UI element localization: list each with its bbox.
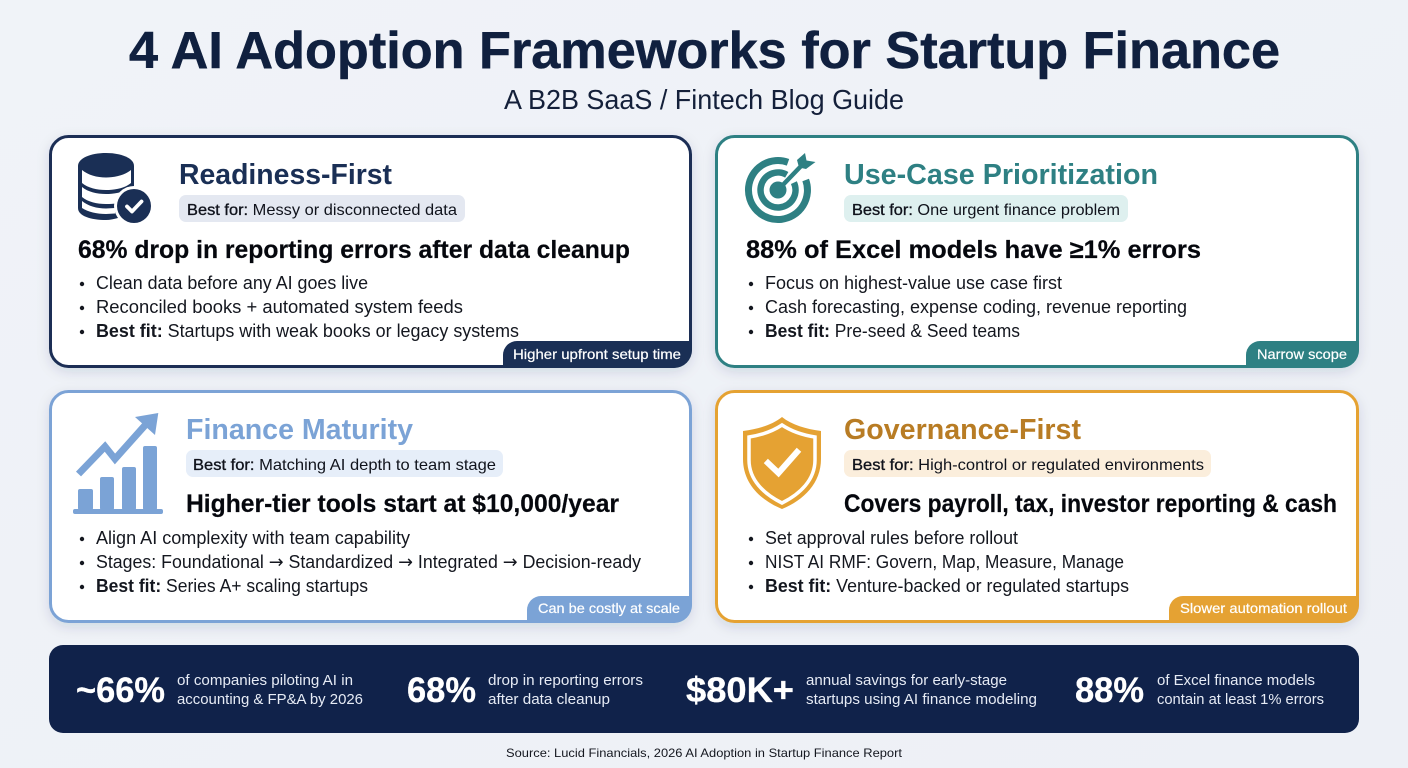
best-for pill: Best for: Matching AI depth to team stage xyxy=(193,457,496,474)
tradeoff tag: Can be costly at scale xyxy=(538,600,680,616)
bullet list: NIST AI RMF: Govern, Map, Measure, Manage xyxy=(765,552,1124,572)
icon: rising bar chart xyxy=(73,413,163,514)
stat: 88% errors xyxy=(1075,671,1324,710)
best-for pill: Best for: One urgent finance problem xyxy=(852,202,1120,219)
heading: Readiness-First xyxy=(179,159,392,191)
stat: $80K+ savings xyxy=(686,671,1037,710)
panel: Governance-First xyxy=(716,392,1359,623)
bullet list xyxy=(749,273,1187,341)
stat: 66% piloting: of companies piloting AI in xyxy=(177,672,353,689)
stat headline: Higher-tier tools start at $10,000/year xyxy=(186,490,619,518)
bullet list: Clean data before any AI goes live xyxy=(96,273,368,293)
subtitle: A B2B SaaS / Fintech Blog Guide xyxy=(504,84,904,115)
stat headline: 88% of Excel models have ≥1% errors xyxy=(746,236,1201,264)
bullet list xyxy=(80,528,641,596)
bullet list xyxy=(749,528,1129,596)
bullet list: Best fit: Pre-seed & Seed teams xyxy=(765,321,1020,341)
stat: 68% drop xyxy=(407,671,643,710)
stat: $80K+ savings: $80K+ xyxy=(686,671,794,710)
stat headline: 68% drop in reporting errors after data cleanup xyxy=(78,236,630,264)
best-for pill xyxy=(186,450,503,477)
icon: target with arrow xyxy=(748,153,816,220)
tradeoff tag: Higher upfront setup time xyxy=(513,346,681,362)
panel: Readiness-First xyxy=(50,136,692,368)
stat: 66% piloting xyxy=(76,671,363,710)
stat: 88% errors: 88% xyxy=(1075,671,1144,710)
bullet list: Best fit: Series A+ scaling startups xyxy=(96,576,368,596)
icon: database with check xyxy=(78,153,154,226)
stat: 66% piloting: ~66% xyxy=(76,671,165,710)
stat: 68% drop: drop in reporting errors xyxy=(488,672,643,689)
tradeoff tag: Slower automation rollout xyxy=(1180,600,1347,616)
tradeoff tag xyxy=(1169,596,1359,623)
stats bar xyxy=(49,645,1359,733)
stat: 68% drop: after data cleanup xyxy=(488,691,610,708)
panel: Finance Maturity xyxy=(50,392,692,623)
stat: $80K+ savings: annual savings for early-stage xyxy=(806,672,1007,689)
bullet list: Focus on highest-value use case first xyxy=(765,273,1062,293)
heading: Use-Case Prioritization xyxy=(844,159,1158,191)
icon: shield with check xyxy=(743,417,821,509)
stat: 88% errors: of Excel finance models xyxy=(1157,672,1315,689)
best-for pill xyxy=(844,195,1128,222)
stat headline: Covers payroll, tax, investor reporting & cash xyxy=(844,490,1337,518)
bullet list: Best fit: Startups with weak books or legacy systems xyxy=(96,321,519,341)
best-for pill xyxy=(179,195,465,222)
bullet list: Best fit: Venture-backed or regulated startups xyxy=(765,576,1129,596)
stat: 68% drop: 68% xyxy=(407,671,476,710)
tradeoff tag xyxy=(527,596,692,623)
panel: Use-Case Prioritization xyxy=(716,136,1359,368)
stat: 66% piloting: accounting & FP&A by 2026 xyxy=(177,691,363,708)
best-for pill xyxy=(844,450,1211,477)
source note: Source: Lucid Financials, 2026 AI Adoption in Startup Finance Report xyxy=(506,746,903,760)
tradeoff tag xyxy=(503,341,692,368)
bullet list xyxy=(80,273,519,341)
heading: Finance Maturity xyxy=(186,414,413,446)
bullet list: Stages: Foundational → Standardized → Integrated → Decision-ready xyxy=(96,552,641,573)
tradeoff tag: Narrow scope xyxy=(1257,346,1347,362)
stat: $80K+ savings: startups using AI finance modeling xyxy=(806,691,1037,708)
best-for pill: Best for: High-control or regulated environments xyxy=(852,457,1204,474)
best-for pill: Best for: Messy or disconnected data xyxy=(187,202,457,219)
bullet list: Set approval rules before rollout xyxy=(765,528,1018,548)
bullet list: Align AI complexity with team capability xyxy=(96,528,410,548)
title: 4 AI Adoption Frameworks for Startup Finance xyxy=(129,22,1280,80)
bullet list: Cash forecasting, expense coding, revenue reporting xyxy=(765,297,1187,317)
tradeoff tag xyxy=(1246,341,1359,368)
heading: Governance-First xyxy=(844,414,1081,446)
bullet list: Reconciled books + automated system feeds xyxy=(96,297,463,317)
stat: 88% errors: contain at least 1% errors xyxy=(1157,691,1324,708)
